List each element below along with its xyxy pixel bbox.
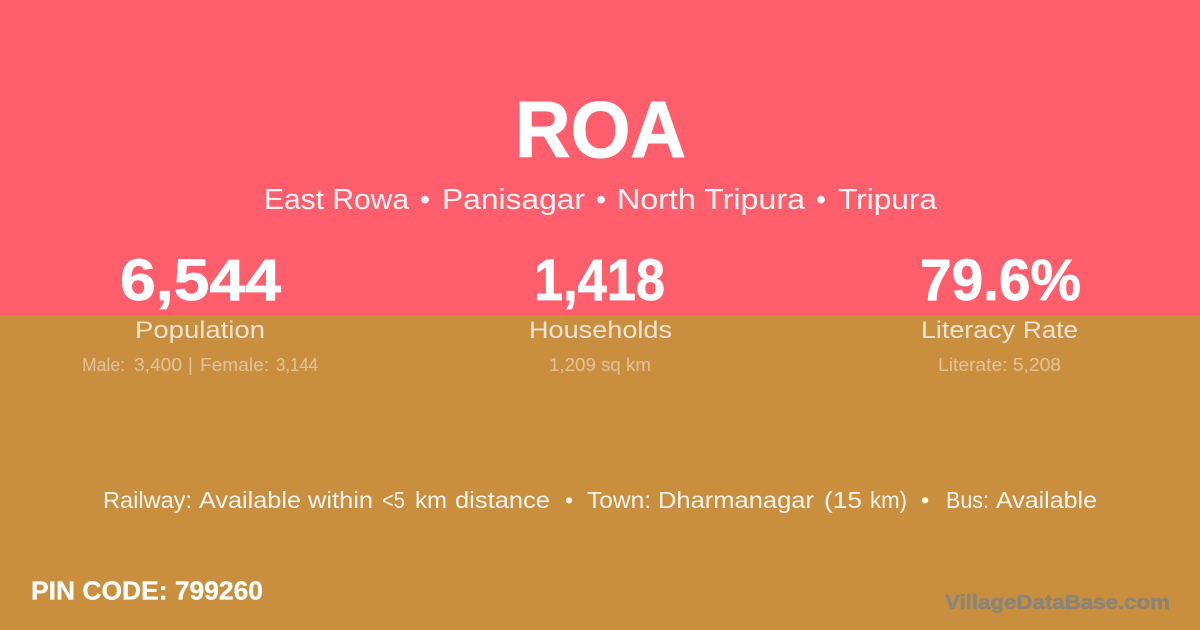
connectivity line: within [307,487,373,513]
population detail: 3,144 [276,354,318,375]
connectivity line: Bus: [946,487,989,513]
population detail: 3,400 [134,354,182,375]
literacy label: Rate [1023,317,1078,344]
households value: 1,418 [534,248,665,313]
literacy detail: Literate: 5,208 [938,354,1061,375]
pin code: PIN CODE: 799260 [31,578,263,606]
connectivity line: Dharmanagar [658,487,814,513]
population detail: Female: [200,354,269,375]
connectivity line: • [921,487,929,513]
stat: households [529,248,672,375]
connectivity line: • [565,487,573,513]
title: ROA [515,85,686,174]
location subtitle: North Tripura [617,184,805,216]
stat: literacy rate [920,248,1081,375]
population detail: | [188,354,193,375]
connectivity line: Available [199,487,301,513]
location subtitle: • [420,184,430,216]
location subtitle: • [816,184,826,216]
population value: 6,544 [120,248,281,313]
watermark: VillageDataBase.com [945,591,1170,614]
panel: top red background [0,0,1200,315]
panel: bottom gold background [0,315,1200,630]
connectivity line: Town: [587,487,651,513]
connectivity line [103,487,1097,513]
location subtitle: • [596,184,606,216]
location subtitle: East Rowa [264,184,409,216]
location subtitle [264,184,937,216]
connectivity line: km) [870,487,907,513]
connectivity line: Railway: [103,487,192,513]
households detail: 1,209 sq km [549,354,651,375]
connectivity line: (15 [824,487,862,513]
population detail: Male: [82,354,125,375]
location subtitle: Panisagar [442,184,586,216]
connectivity line: km [415,487,447,513]
connectivity line: distance [455,487,550,513]
population label: Population [135,317,265,344]
literacy label [921,317,1078,344]
households label: Households [529,317,672,344]
literacy label: Literacy [921,317,1016,344]
population detail [82,354,318,375]
location subtitle: Tripura [838,184,937,216]
literacy value: 79.6% [920,248,1081,313]
connectivity line: Available [996,487,1097,513]
stat: population [82,248,318,375]
connectivity line: <5 [382,487,405,513]
